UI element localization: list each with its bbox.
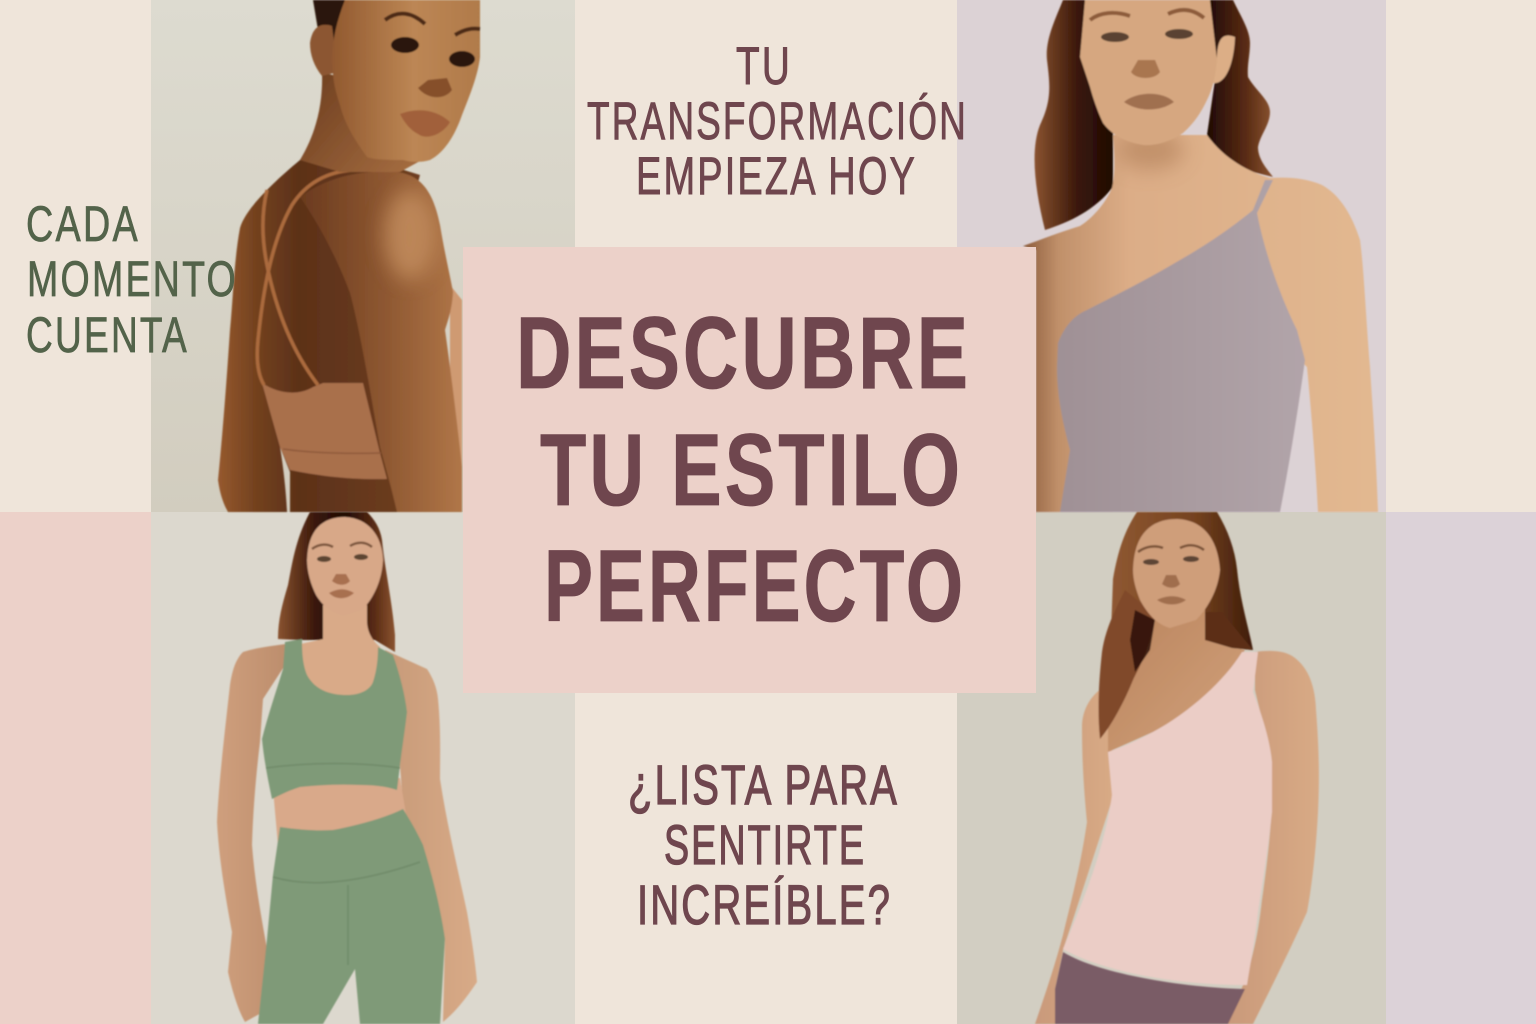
near arm and shoulder <box>300 172 462 512</box>
eyes <box>391 37 419 53</box>
text: cada momento cuenta: CADA <box>26 196 140 252</box>
lips <box>1124 94 1174 110</box>
nose and lips <box>329 574 354 598</box>
midriff <box>272 778 407 845</box>
main title: PERFECTO <box>544 529 966 643</box>
lilac top <box>1057 180 1305 512</box>
text: cada momento cuenta <box>26 196 238 363</box>
figure: model in lilac one-shoulder top <box>1023 0 1378 512</box>
center title panel <box>463 247 1036 693</box>
face <box>1133 519 1220 628</box>
face <box>1080 0 1217 145</box>
lips <box>400 110 450 137</box>
hair over shoulder <box>1099 590 1155 739</box>
neck <box>300 72 440 172</box>
right arm <box>1227 651 1319 1024</box>
text: cada momento cuenta: MOMENTO <box>27 251 238 307</box>
bra side panel <box>450 285 462 475</box>
hair <box>313 0 370 62</box>
nose and lips <box>1157 575 1186 604</box>
waistband seam <box>273 862 420 965</box>
text: lista para sentirte increíble: SENTIRTE <box>664 813 866 876</box>
text: cada momento cuenta: CUENTA <box>26 307 189 363</box>
ear <box>1213 36 1235 83</box>
eyes <box>317 556 331 562</box>
dark hair shadow <box>1130 610 1155 672</box>
pink top <box>1063 652 1272 985</box>
main title <box>516 296 971 643</box>
face <box>332 0 480 162</box>
bra hem line <box>283 449 381 453</box>
text: tu transformación empieza hoy: TRANSFORMACIÓN <box>587 92 968 151</box>
left arm and shoulder <box>217 642 300 1022</box>
text: tu transformación empieza hoy <box>587 37 968 206</box>
brows <box>385 14 480 35</box>
figure: model in pink one-shoulder top <box>1035 512 1319 1024</box>
main title: TU ESTILO <box>540 413 963 527</box>
text: tu transformación empieza hoy: TU <box>736 37 792 96</box>
right arm and shoulder <box>385 650 477 1022</box>
text: lista para sentirte increíble: INCREÍBLE? <box>637 873 892 936</box>
neck and chest <box>1108 605 1245 752</box>
bra band <box>262 383 387 479</box>
mauve leggings <box>1055 952 1245 1024</box>
eyes <box>1143 559 1159 565</box>
brows <box>312 543 372 549</box>
green leggings <box>258 809 445 1024</box>
bra band seam <box>266 764 400 768</box>
neck and chest <box>296 605 380 705</box>
nose shadow <box>418 78 452 97</box>
left hair <box>1035 0 1113 230</box>
back hair <box>1110 512 1253 660</box>
brows <box>1138 545 1204 552</box>
main title: DESCUBRE <box>516 296 971 410</box>
text: lista para sentirte increíble: ¿LISTA PARA <box>628 753 899 816</box>
back and far arm <box>218 90 420 512</box>
text: tu transformación empieza hoy: EMPIEZA HOY <box>636 147 917 206</box>
right hair <box>1207 0 1273 177</box>
face <box>307 517 383 616</box>
left arm <box>1035 684 1112 1024</box>
nose shadow <box>1131 60 1160 78</box>
figure: model in green set <box>217 512 477 1024</box>
right hair lock <box>1205 612 1253 650</box>
hair <box>278 512 345 640</box>
bra straps <box>257 170 353 385</box>
ear <box>310 25 338 76</box>
green bra <box>262 639 407 799</box>
neck shading <box>1116 130 1184 170</box>
shoulder highlight <box>384 190 436 280</box>
brows <box>1090 10 1204 20</box>
text: lista para sentirte increíble <box>628 753 899 936</box>
arms, neck and chest <box>1023 135 1378 512</box>
eyes <box>1101 32 1129 42</box>
figure: model in peach crossback bra <box>218 0 480 512</box>
